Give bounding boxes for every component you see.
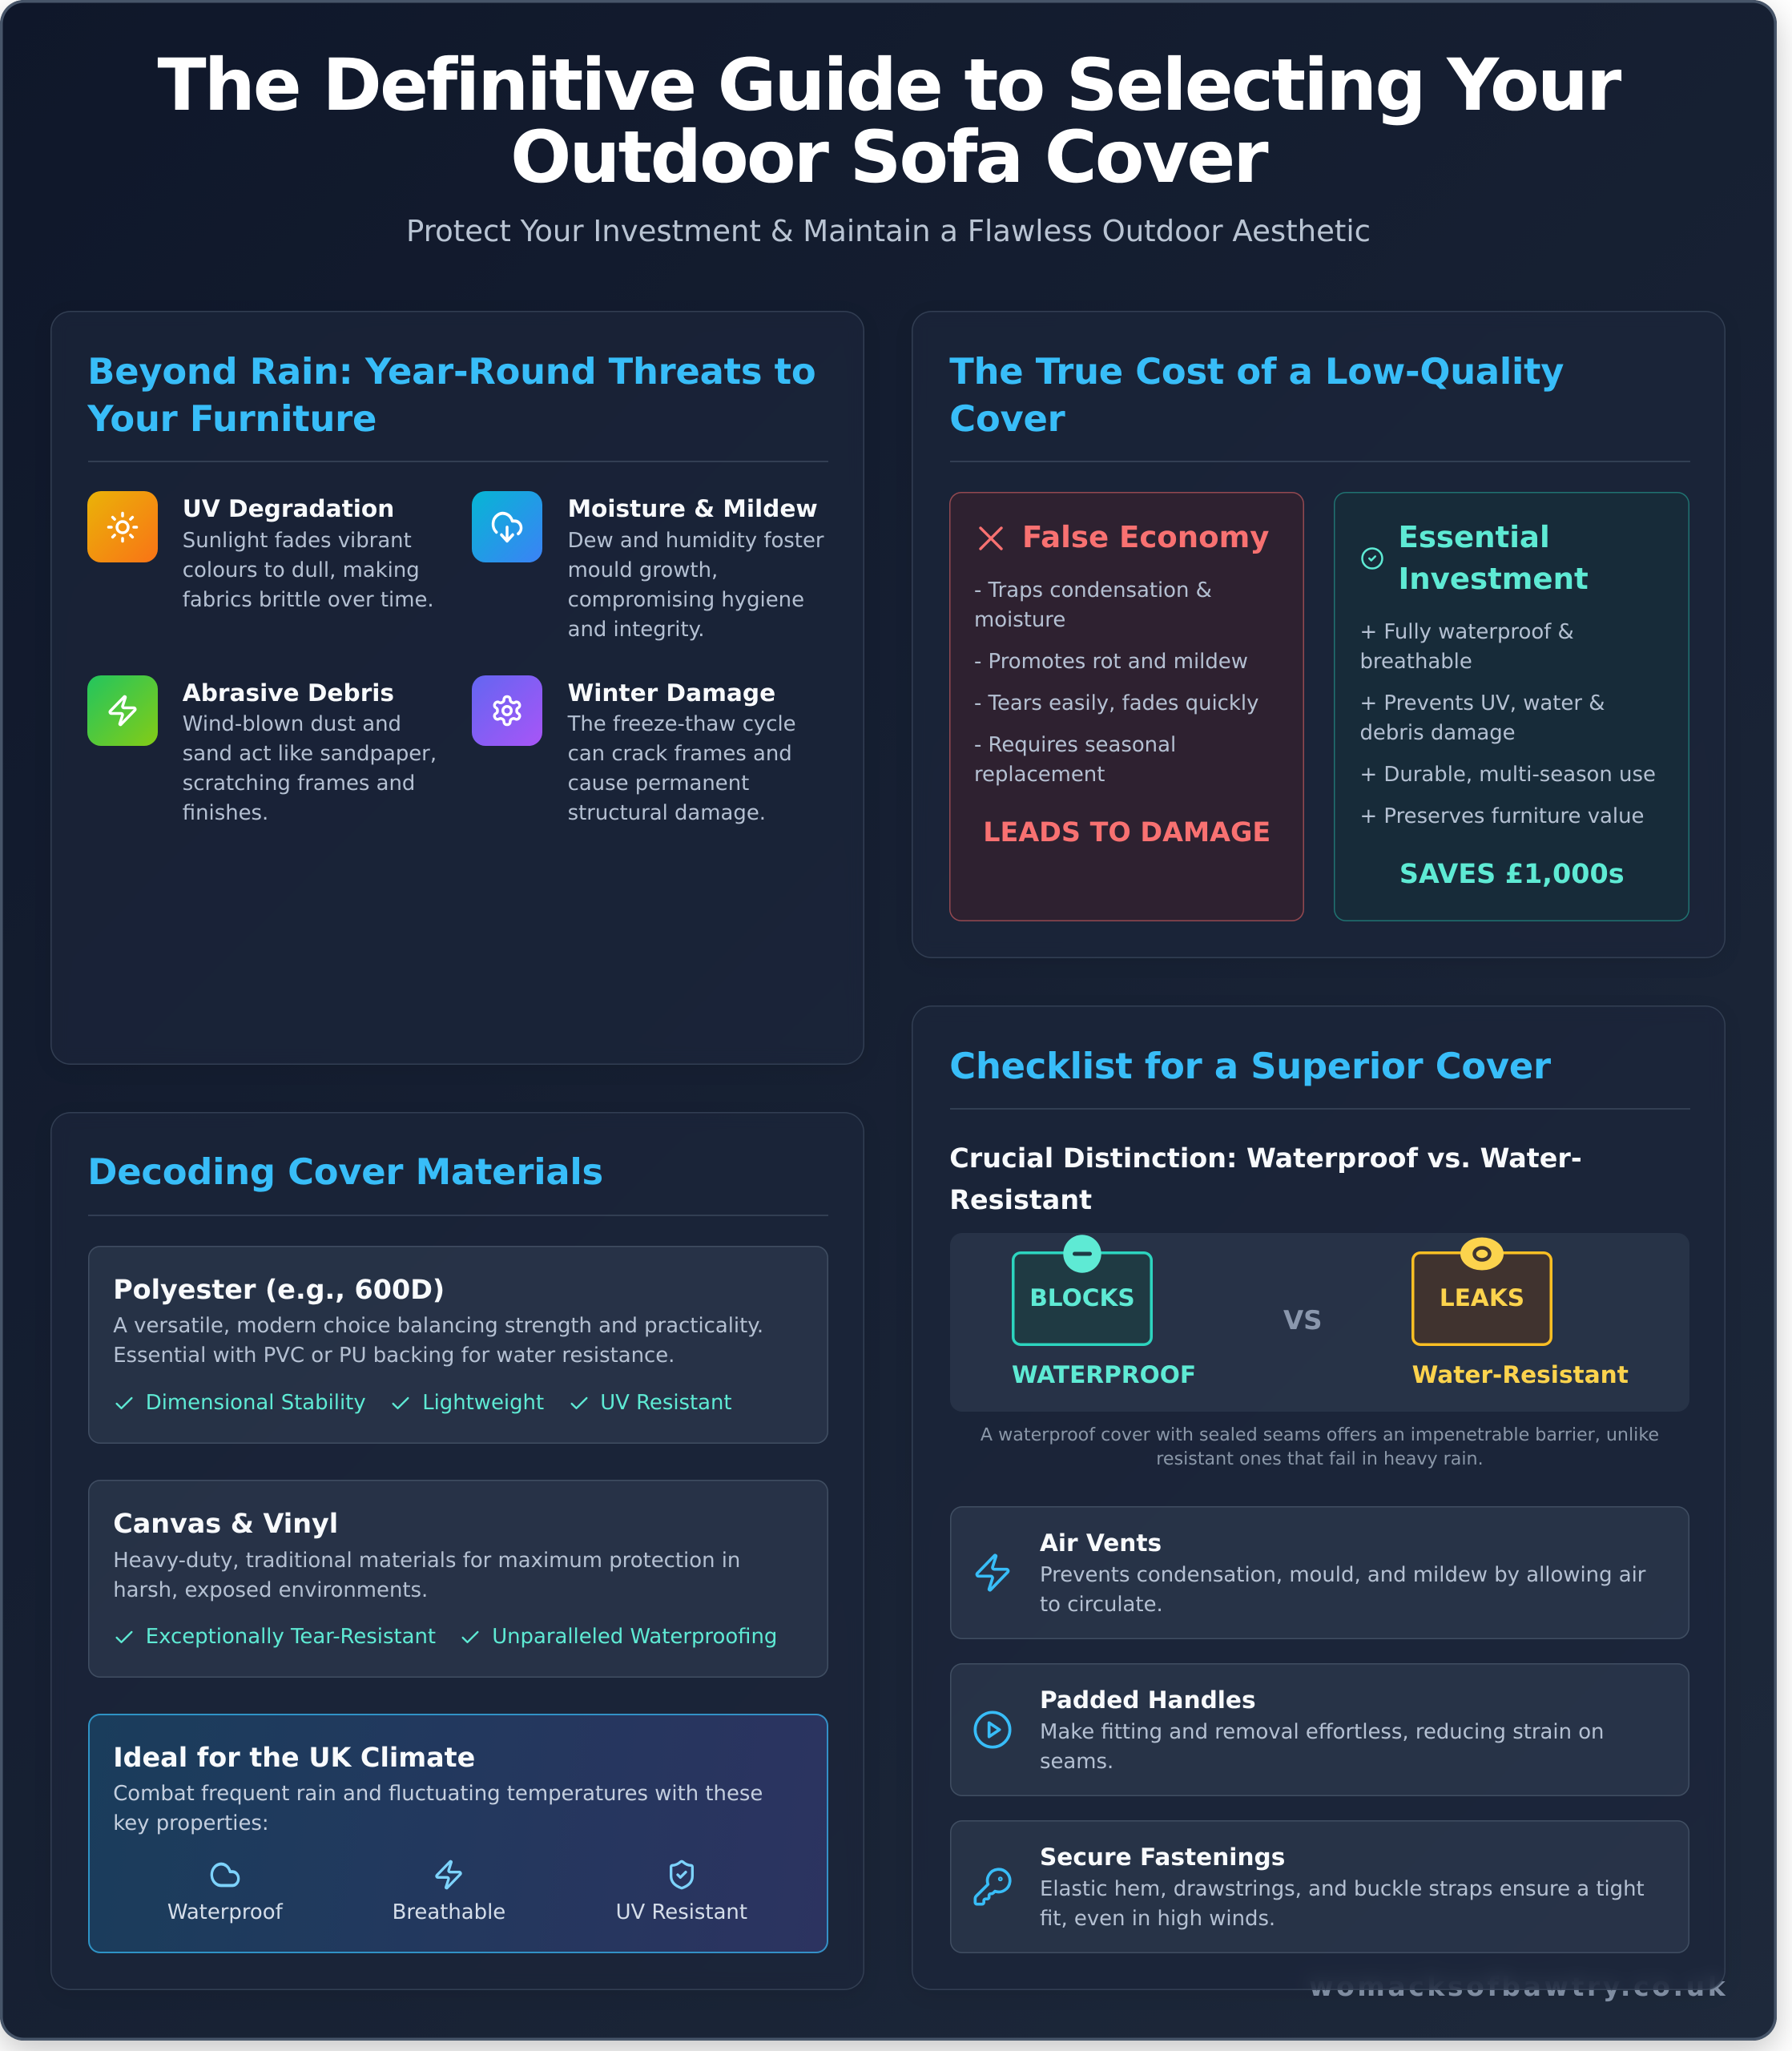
heading: materials: Decoding Cover Materials bbox=[87, 1150, 603, 1193]
waterproof swatch bbox=[1012, 1251, 1153, 1346]
feature text: fit, even in high winds. bbox=[1040, 1907, 1275, 1931]
watermark: womacksofbawtry.co.uk bbox=[1309, 1971, 1728, 2001]
icon: cloud download bbox=[472, 491, 542, 562]
benefits list: debris damage bbox=[1359, 721, 1516, 745]
explanatory note: resistant ones that fail in heavy rain. bbox=[1156, 1449, 1484, 1469]
threat text: The freeze-thaw cycle bbox=[568, 712, 796, 736]
water-resistant label: Water-Resistant bbox=[1412, 1361, 1629, 1388]
benefits list: + Prevents UV, water & bbox=[1359, 691, 1605, 715]
callout text: Combat frequent rain and fluctuating temperatures with these bbox=[113, 1782, 763, 1806]
water-resistant swatch bbox=[1411, 1251, 1552, 1346]
callout title: Ideal for the UK Climate bbox=[113, 1742, 475, 1773]
label: Waterproof bbox=[167, 1900, 283, 1924]
threat: winter damage bbox=[472, 675, 796, 825]
threat text bbox=[183, 529, 434, 612]
threat text: Sunlight fades vibrant bbox=[183, 529, 412, 553]
feature text bbox=[1040, 1875, 1645, 1934]
title bbox=[157, 44, 1621, 199]
drawbacks list: - Requires seasonal bbox=[974, 733, 1176, 757]
label: Breathable bbox=[393, 1900, 505, 1924]
threat text: finishes. bbox=[183, 801, 268, 825]
threat text: cause permanent bbox=[568, 772, 749, 796]
tag: tear resistant: Exceptionally Tear-Resistant bbox=[146, 1625, 436, 1649]
threat text: Dew and humidity foster bbox=[568, 529, 824, 553]
outcome: LEADS TO DAMAGE bbox=[983, 816, 1271, 848]
benefits list bbox=[1359, 620, 1656, 828]
threat: UV degradation bbox=[87, 491, 434, 612]
threat text: structural damage. bbox=[568, 801, 766, 825]
tag: UV resistant: UV Resistant bbox=[600, 1391, 732, 1415]
icon: sun bbox=[87, 491, 158, 562]
card heading bbox=[1398, 520, 1589, 596]
icon: cloud bbox=[210, 1862, 240, 1888]
tag: waterproofing: Unparalleled Waterproofing bbox=[492, 1625, 777, 1649]
icon: gear bbox=[472, 675, 542, 746]
threat text: sand act like sandpaper, bbox=[183, 742, 437, 766]
callout text bbox=[113, 1782, 763, 1835]
swatch label: BLOCKS bbox=[1029, 1284, 1135, 1312]
threat title: UV Degradation bbox=[183, 495, 394, 522]
benefits list: + Durable, multi-season use bbox=[1359, 763, 1656, 787]
heading: threats: Beyond Rain: Year-Round Threats to bbox=[87, 350, 815, 393]
property: breathable bbox=[393, 1860, 505, 1924]
panel: cover materials bbox=[50, 1112, 864, 1990]
threat text: and integrity. bbox=[568, 618, 704, 642]
material description: Essential with PVC or PU backing for water resistance. bbox=[113, 1344, 675, 1368]
benefits list: + Fully waterproof & bbox=[1359, 620, 1574, 644]
feature title: Air Vents bbox=[1040, 1529, 1162, 1557]
threat text bbox=[568, 529, 824, 642]
icon: bolt bbox=[435, 1860, 462, 1889]
benefits list: breathable bbox=[1359, 650, 1472, 674]
threat: moisture and mildew bbox=[472, 491, 824, 642]
icon: cross bbox=[979, 526, 1003, 550]
material description: A versatile, modern choice balancing strength and practicality. bbox=[113, 1314, 763, 1338]
icon: circle check bbox=[1361, 547, 1383, 570]
comparison diagram: waterproof vs water-resistant bbox=[950, 1233, 1689, 1412]
icon: leak badge bbox=[1460, 1237, 1504, 1271]
icon: play circle bbox=[974, 1711, 1011, 1748]
drawbacks list: replacement bbox=[974, 763, 1105, 787]
benefits list: + Preserves furniture value bbox=[1359, 804, 1644, 828]
drawbacks list: - Tears easily, fades quickly bbox=[974, 691, 1258, 715]
feature text: Prevents condensation, mould, and mildew by allowing air bbox=[1040, 1563, 1645, 1587]
icon: key bbox=[972, 1866, 1013, 1908]
subtitle: Protect Your Investment & Maintain a Flawless Outdoor Aesthetic bbox=[406, 214, 1371, 248]
subheading: crucial distinction bbox=[949, 1142, 1582, 1215]
threat: abrasive debris bbox=[87, 675, 437, 825]
title: Outdoor Sofa Cover bbox=[510, 116, 1266, 199]
icon: shield bbox=[670, 1860, 694, 1889]
material title: Canvas & Vinyl bbox=[113, 1508, 338, 1539]
comparison card: essential investment bbox=[1334, 492, 1689, 921]
drawbacks list: - Traps condensation & bbox=[974, 578, 1212, 602]
feature: padded handles bbox=[950, 1663, 1689, 1796]
threat text: scratching frames and bbox=[183, 772, 415, 796]
callout: UK climate bbox=[88, 1714, 828, 1953]
material description: Heavy-duty, traditional materials for maximum protection in bbox=[113, 1549, 740, 1573]
property: UV resistant bbox=[616, 1860, 747, 1924]
heading: checklist: Checklist for a Superior Cover bbox=[949, 1045, 1551, 1087]
icon: bolt bbox=[976, 1553, 1009, 1592]
outcome: SAVES £1,000s bbox=[1399, 857, 1625, 889]
heading: true cost: Cover bbox=[949, 397, 1065, 440]
card heading: Investment bbox=[1398, 562, 1589, 596]
feature text: Elastic hem, drawstrings, and buckle straps ensure a tight bbox=[1040, 1877, 1645, 1901]
feature title: Padded Handles bbox=[1040, 1686, 1256, 1714]
panel: checklist bbox=[912, 1005, 1726, 1990]
threat title: Moisture & Mildew bbox=[568, 495, 818, 522]
material description bbox=[113, 1549, 740, 1602]
subheading: crucial distinction: Crucial Distinction: Waterproof vs. Water- bbox=[949, 1142, 1582, 1174]
swatch label: LEAKS bbox=[1440, 1284, 1524, 1312]
label: UV Resistant bbox=[616, 1900, 747, 1924]
threat text bbox=[567, 712, 796, 825]
material description bbox=[113, 1314, 763, 1368]
threat text bbox=[183, 712, 437, 825]
heading: threats bbox=[87, 350, 815, 440]
feature text: to circulate. bbox=[1040, 1593, 1163, 1617]
tag: dimensional stability: Dimensional Stability bbox=[146, 1391, 366, 1415]
heading: true cost: The True Cost of a Low-Quality bbox=[949, 350, 1564, 393]
icon: blocked drop badge bbox=[1063, 1235, 1101, 1273]
feature: air vents bbox=[950, 1506, 1689, 1639]
panel: year-round threats bbox=[50, 311, 864, 1064]
material card: canvas and vinyl bbox=[88, 1480, 828, 1678]
threat text: can crack frames and bbox=[568, 742, 792, 766]
callout text: key properties: bbox=[113, 1811, 269, 1835]
material description: harsh, exposed environments. bbox=[113, 1578, 428, 1602]
feature text: Make fitting and removal effortless, reducing strain on bbox=[1040, 1720, 1604, 1744]
vs label: VS bbox=[1283, 1305, 1323, 1336]
drawbacks list bbox=[974, 578, 1258, 787]
explanatory note bbox=[981, 1424, 1659, 1469]
feature title: Secure Fastenings bbox=[1040, 1843, 1285, 1871]
property: waterproof bbox=[167, 1862, 284, 1924]
heading: true cost bbox=[949, 350, 1564, 440]
tag: lightweight: Lightweight bbox=[422, 1391, 544, 1415]
feature: secure fastenings bbox=[950, 1820, 1689, 1953]
threat title: Abrasive Debris bbox=[183, 679, 394, 707]
threat text: compromising hygiene bbox=[568, 588, 804, 612]
threat text: fabrics brittle over time. bbox=[183, 588, 434, 612]
icon: bolt bbox=[87, 675, 158, 746]
explanatory note: A waterproof cover with sealed seams offers an impenetrable barrier, unlike bbox=[981, 1424, 1659, 1445]
waterproof label: WATERPROOF bbox=[1012, 1361, 1196, 1388]
title: The Definitive Guide to Selecting Your bbox=[157, 44, 1620, 127]
threat title: Winter Damage bbox=[568, 679, 775, 707]
feature text bbox=[1040, 1563, 1645, 1617]
drawbacks list: moisture bbox=[974, 608, 1065, 632]
card heading: False Economy bbox=[1022, 520, 1269, 554]
subheading: crucial distinction: Resistant bbox=[949, 1184, 1092, 1215]
drawbacks list: - Promotes rot and mildew bbox=[974, 650, 1248, 674]
heading: threats: Your Furniture bbox=[87, 397, 377, 440]
feature text: seams. bbox=[1040, 1750, 1113, 1774]
material card: polyester bbox=[88, 1245, 828, 1444]
material title: Polyester (e.g., 600D) bbox=[113, 1274, 445, 1305]
card heading: Essential bbox=[1398, 520, 1550, 554]
threat text: mould growth, bbox=[568, 558, 718, 582]
panel: true cost bbox=[912, 311, 1726, 958]
threat text: Wind-blown dust and bbox=[183, 712, 401, 736]
comparison card: false economy bbox=[949, 492, 1304, 921]
threat text: colours to dull, making bbox=[183, 558, 420, 582]
feature text bbox=[1040, 1718, 1604, 1777]
